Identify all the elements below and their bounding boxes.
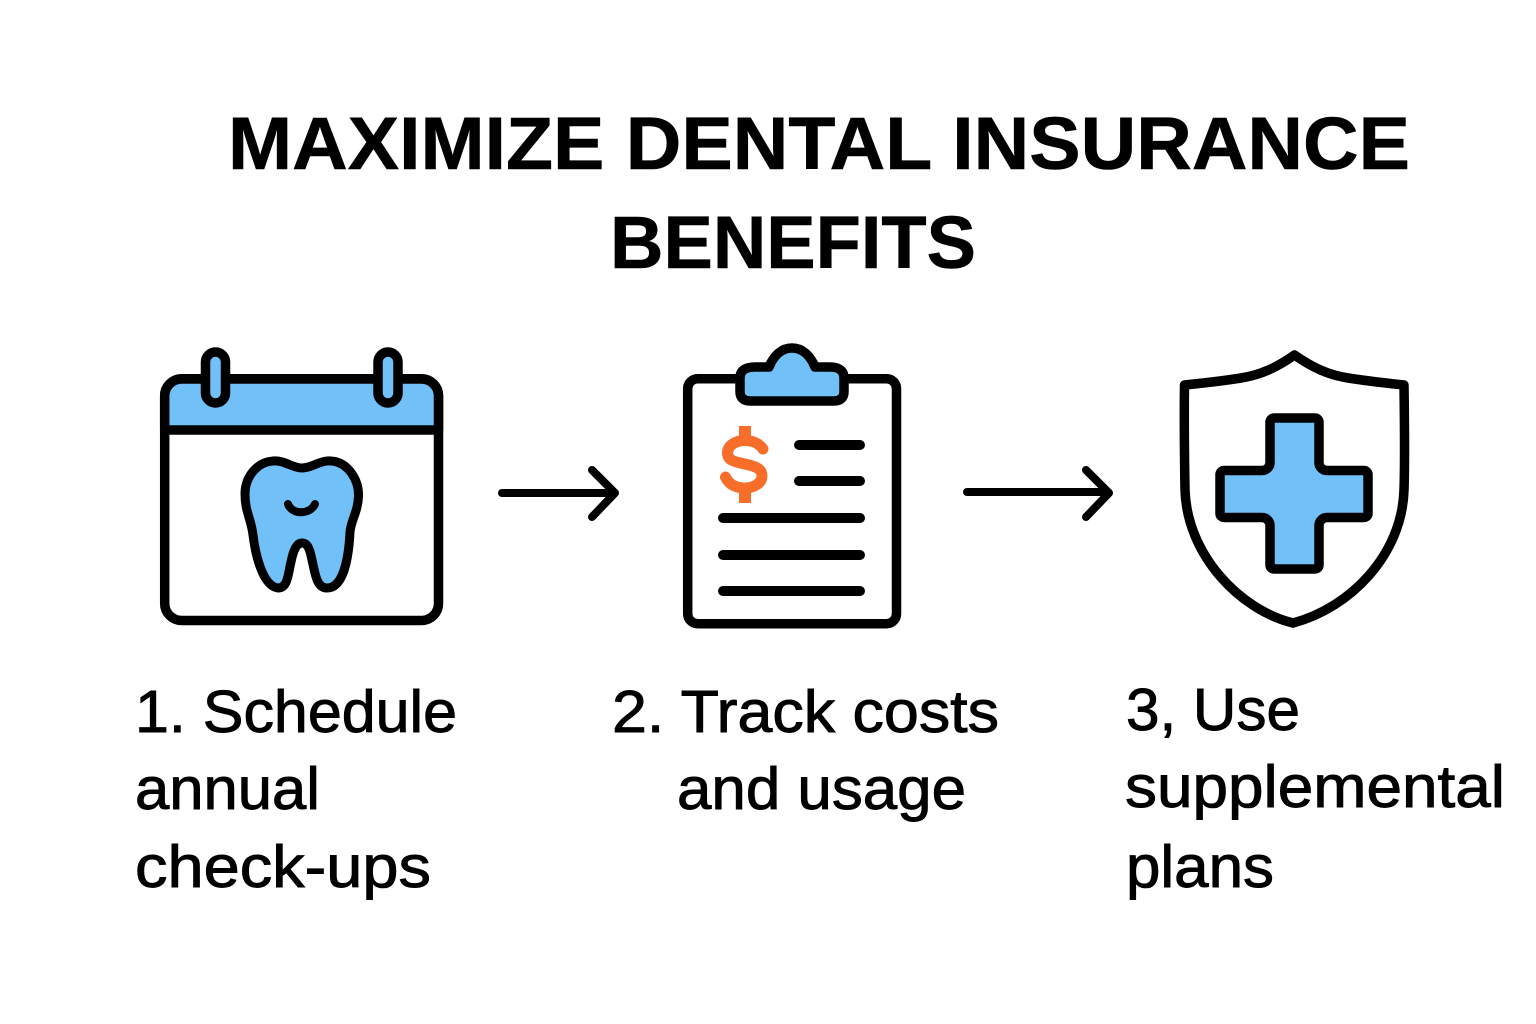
step 3 label: supplemental	[1125, 754, 1505, 820]
title	[228, 102, 1410, 284]
step 2 label	[612, 679, 999, 822]
icon: shield with medical cross	[1184, 355, 1405, 623]
step 1 label: annual	[135, 756, 320, 822]
step 1 label: 1. Schedule	[135, 679, 457, 745]
step 3 label	[1125, 677, 1505, 900]
icon: clipboard with dollar sign	[688, 348, 896, 624]
title: MAXIMIZE DENTAL INSURANCE	[228, 102, 1410, 185]
arrow: step 2 to step 3	[967, 470, 1109, 517]
icon: calendar with tooth	[165, 352, 438, 620]
step 1 label: check-ups	[135, 834, 431, 900]
step 3 label: plans	[1126, 834, 1274, 900]
step 1 label	[135, 679, 457, 900]
arrow: step 1 to step 2	[502, 470, 615, 517]
title: BENEFITS	[610, 201, 976, 284]
step 2 label: 2. Track costs	[612, 679, 999, 745]
icon detail: dollar sign	[726, 426, 763, 503]
step 2 label: and usage	[677, 756, 966, 822]
step 3 label: 3, Use	[1126, 677, 1300, 743]
